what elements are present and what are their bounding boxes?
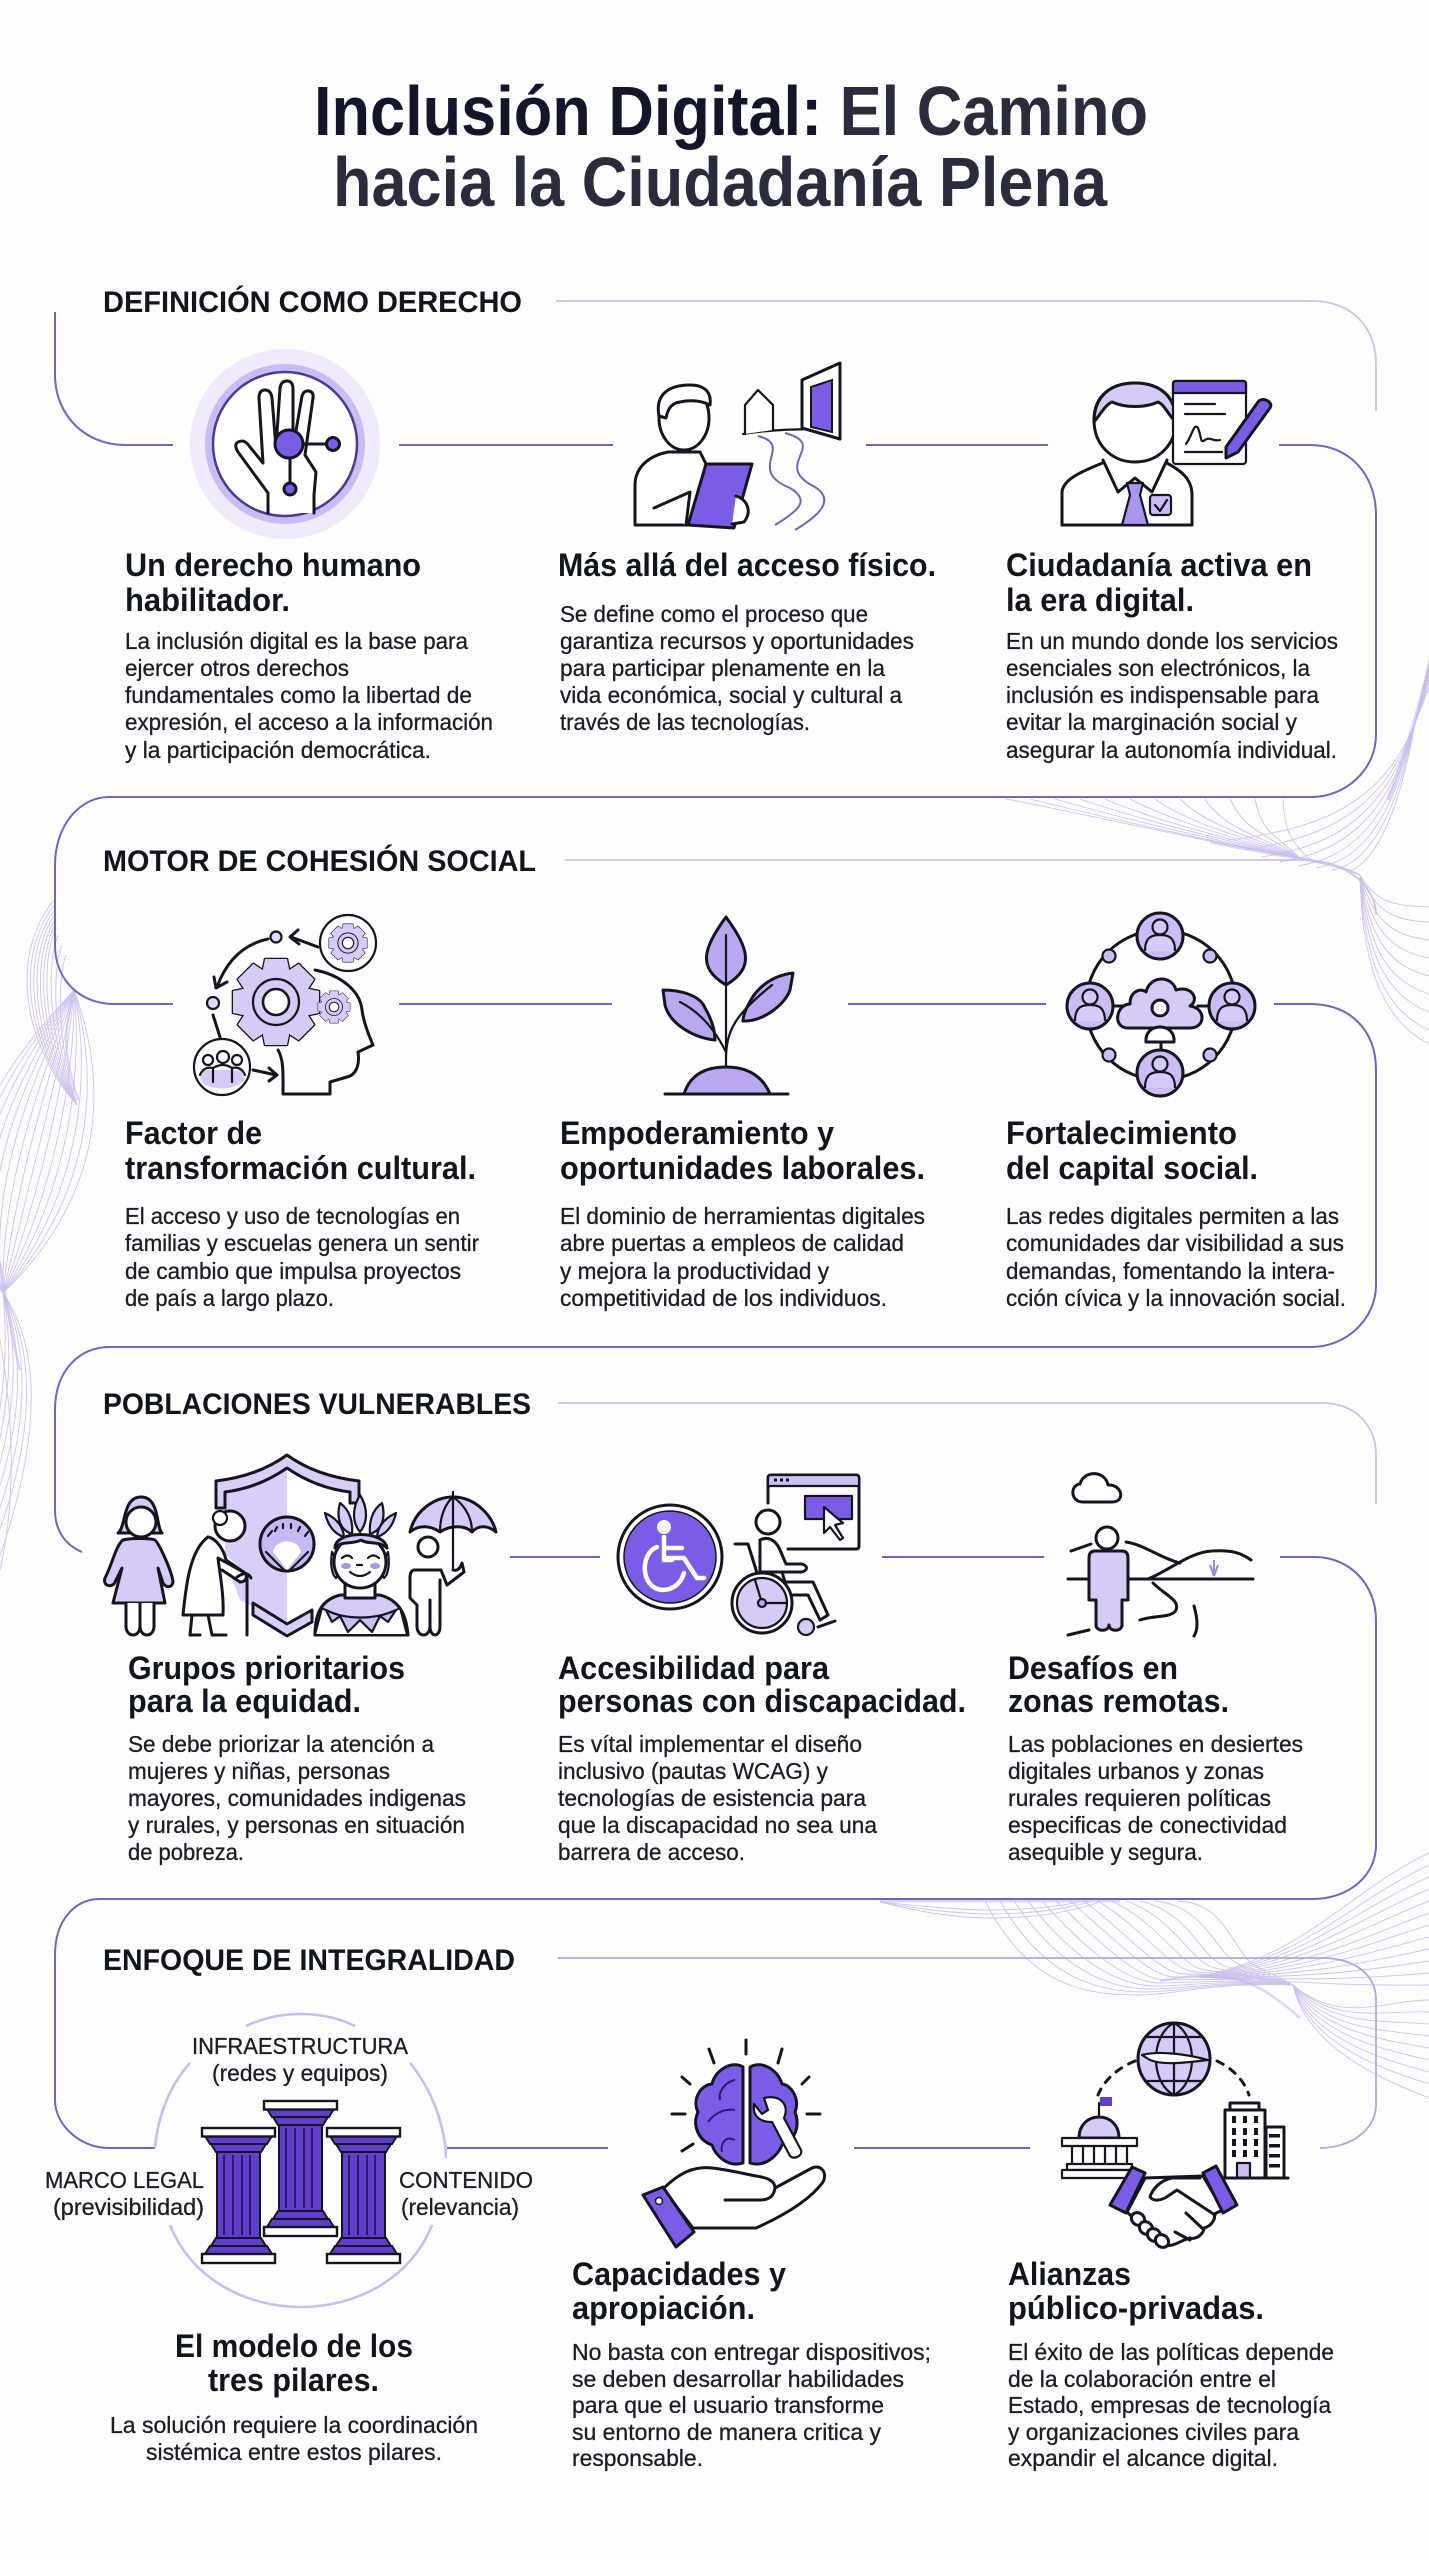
- icon: person with tablet and road: [635, 363, 840, 530]
- text: más allá del acceso físico: Más allá del acceso físico.: [558, 547, 936, 583]
- text: modelo de tres pilares: tres pilares.: [208, 2362, 379, 2398]
- text: factor de transformación: de país a largo plazo.: [125, 1285, 334, 1311]
- text: accesibilidad: [558, 1650, 966, 1865]
- text: capacidades: [572, 2256, 931, 2471]
- text: factor de transformación: transformación cultural.: [125, 1150, 476, 1186]
- label: infraestructura: [192, 2033, 409, 2086]
- label: marco legal: (previsibilidad): [53, 2194, 204, 2220]
- section heading: POBLACIONES VULNERABLES: [103, 1388, 531, 1421]
- section heading: MOTOR DE COHESIÓN SOCIAL: [103, 844, 536, 878]
- icon: brain in hand: [643, 2040, 825, 2247]
- text: un derecho humano: [125, 547, 493, 763]
- text: un derecho humano: La inclusión digital es la base para: [125, 628, 468, 654]
- text: ciudadanía activa: la era digital.: [1006, 582, 1194, 618]
- text: empoderamiento: [560, 1115, 925, 1311]
- text: ciudadanía activa: evitar la marginación social y: [1006, 709, 1297, 735]
- text: accesibilidad: Es vítal implementar el diseño: [558, 1731, 862, 1757]
- icon: remote zones: [1068, 1474, 1253, 1636]
- text: factor de transformación: [125, 1115, 479, 1311]
- text: empoderamiento: oportunidades laborales.: [560, 1150, 925, 1186]
- decorative wave lines: [0, 660, 1429, 2098]
- text: un derecho humano: fundamentales como la libertad de: [125, 682, 472, 708]
- text: modelo de tres pilares: sistémica entre estos pilares.: [146, 2439, 442, 2465]
- text: grupos prioritarios: [128, 1650, 466, 1865]
- icon: hand in circle: [190, 349, 380, 539]
- text: alianzas: de la colaboración entre el: [1008, 2366, 1276, 2392]
- text: empoderamiento: abre puertas a empleos de calidad: [560, 1230, 904, 1256]
- text: fortalecimiento: Las redes digitales permiten a las: [1006, 1203, 1339, 1229]
- text: accesibilidad: inclusivo (pautas WCAG) y: [558, 1758, 828, 1784]
- text: ciudadanía activa: asegurar la autonomía individual.: [1006, 737, 1337, 763]
- text: grupos prioritarios: y rurales, y personas en situación: [128, 1812, 465, 1838]
- text: más allá del acceso físico: Se define como el proceso que: [560, 601, 868, 627]
- text: fortalecimiento: comunidades dar visibilidad a sus: [1006, 1230, 1344, 1256]
- text: alianzas: expandir el alcance digital.: [1008, 2445, 1278, 2471]
- text: más allá del acceso físico: para participar plenamente en la: [560, 655, 885, 681]
- icon: head with gears: [194, 915, 376, 1095]
- panel: motor de cohesión social: [103, 844, 1346, 1311]
- title: Inclusión Digital: El Camino: [314, 72, 1148, 150]
- boy with umbrella: [410, 1492, 496, 1635]
- shield: [216, 1455, 359, 1636]
- text: capacidades: su entorno de manera critica y: [572, 2419, 881, 2445]
- section heading: ENFOQUE DE INTEGRALIDAD: [103, 1944, 515, 1977]
- label: marco legal: [45, 2167, 204, 2220]
- text: alianzas: El éxito de las políticas depende: [1008, 2339, 1334, 2365]
- text: factor de transformación: familias y escuelas genera un sentir: [125, 1230, 479, 1256]
- icon: public-private alliance: [1062, 2023, 1288, 2250]
- text: más allá del acceso físico: [558, 547, 936, 735]
- panel: enfoque de integralidad: [45, 1944, 1334, 2471]
- text: capacidades: No basta con entregar dispositivos;: [572, 2339, 931, 2365]
- text: más allá del acceso físico: través de las tecnologías.: [560, 709, 810, 735]
- text: empoderamiento: El dominio de herramientas digitales: [560, 1203, 925, 1229]
- text: capacidades: responsable.: [572, 2445, 703, 2471]
- text: alianzas: público-privadas.: [1008, 2290, 1264, 2326]
- text: alianzas: Estado, empresas de tecnología: [1008, 2392, 1331, 2418]
- text: desafíos: asequible y segura.: [1008, 1839, 1203, 1865]
- text: modelo de tres pilares: [110, 2328, 478, 2465]
- text: factor de transformación: de cambio que impulsa proyectos: [125, 1258, 461, 1284]
- label: infraestructura: (redes y equipos): [212, 2060, 388, 2086]
- decorative wave thick accents: [0, 670, 1429, 2018]
- text: desafíos: digitales urbanos y zonas: [1008, 1758, 1264, 1784]
- text: fortalecimiento: cción cívica y la innovación social.: [1006, 1285, 1346, 1311]
- text: alianzas: y organizaciones civiles para: [1008, 2419, 1299, 2445]
- text: modelo de tres pilares: La solución requiere la coordinación: [110, 2412, 478, 2438]
- icon: priority groups with shield: [105, 1455, 496, 1636]
- text: más allá del acceso físico: garantiza recursos y oportunidades: [560, 628, 914, 654]
- panel: poblaciones vulnerables: [103, 1388, 1303, 1865]
- label: marco legal: MARCO LEGAL: [45, 2167, 204, 2193]
- text: empoderamiento: y mejora la productividad y: [560, 1258, 829, 1284]
- text: factor de transformación: El acceso y uso de tecnologías en: [125, 1203, 460, 1229]
- icon: growing plant: [663, 917, 793, 1094]
- label: contenido: (relevancia): [401, 2194, 519, 2220]
- panel: definición como derecho: [103, 285, 1338, 763]
- title: hacia la Ciudadanía Plena: [333, 143, 1108, 221]
- text: más allá del acceso físico: vida económica, social y cultural a: [560, 682, 902, 708]
- text: desafíos: Las poblaciones en desiertes: [1008, 1731, 1303, 1757]
- text: grupos prioritarios: Grupos prioritarios: [128, 1650, 405, 1686]
- label: contenido: [399, 2167, 533, 2220]
- panel connectors: section outlines: [55, 301, 1376, 2148]
- text: accesibilidad: tecnologías de esistencia para: [558, 1785, 866, 1811]
- text: capacidades: se deben desarrollar habilidades: [572, 2366, 904, 2392]
- text: fortalecimiento: demandas, fomentando la intera-: [1006, 1258, 1335, 1284]
- text: grupos prioritarios: de pobreza.: [128, 1839, 244, 1865]
- text: ciudadanía activa: inclusión es indispensable para: [1006, 682, 1319, 708]
- indigenous figure: [315, 1495, 408, 1635]
- text: desafíos: zonas remotas.: [1008, 1683, 1229, 1719]
- text: modelo de tres pilares: El modelo de los: [175, 2328, 413, 2364]
- girl figure: [105, 1497, 173, 1635]
- icon: citizen with document: [1062, 381, 1271, 525]
- text: ciudadanía activa: Ciudadanía activa en: [1006, 547, 1312, 583]
- text: desafíos: Desafíos en: [1008, 1650, 1178, 1686]
- text: ciudadanía activa: [1006, 547, 1338, 763]
- text: capacidades: para que el usuario transforme: [572, 2392, 884, 2418]
- text: un derecho humano: Un derecho humano: [125, 547, 421, 583]
- text: capacidades: apropiación.: [572, 2290, 755, 2326]
- text: un derecho humano: ejercer otros derechos: [125, 655, 349, 681]
- text: empoderamiento: competitividad de los individuos.: [560, 1285, 887, 1311]
- text: grupos prioritarios: mujeres y niñas, personas: [128, 1758, 390, 1784]
- text: ciudadanía activa: En un mundo donde los servicios: [1006, 628, 1338, 654]
- text: fortalecimiento: Fortalecimiento: [1006, 1115, 1237, 1151]
- text: accesibilidad: personas con discapacidad.: [558, 1683, 966, 1719]
- text: un derecho humano: expresión, el acceso a la información: [125, 709, 493, 735]
- text: accesibilidad: que la discapacidad no sea una: [558, 1812, 877, 1838]
- text: fortalecimiento: [1006, 1115, 1346, 1311]
- text: grupos prioritarios: para la equidad.: [128, 1683, 361, 1719]
- text: desafíos: [1008, 1650, 1303, 1865]
- text: ciudadanía activa: esenciales son electrónicos, la: [1006, 655, 1310, 681]
- text: accesibilidad: Accesibilidad para: [558, 1650, 829, 1686]
- text: empoderamiento: Empoderamiento y: [560, 1115, 834, 1151]
- text: alianzas: Alianzas: [1008, 2256, 1131, 2292]
- diagram: three pillars: [45, 2014, 533, 2307]
- section heading: DEFINICIÓN COMO DERECHO: [103, 285, 522, 319]
- text: fortalecimiento: del capital social.: [1006, 1150, 1258, 1186]
- text: grupos prioritarios: Se debe priorizar la atención a: [128, 1731, 434, 1757]
- text: un derecho humano: y la participación democrática.: [125, 737, 431, 763]
- text: grupos prioritarios: mayores, comunidades indigenas: [128, 1785, 466, 1811]
- elder figure: [183, 1511, 251, 1635]
- text: desafíos: rurales requieren políticas: [1008, 1785, 1271, 1811]
- text: capacidades: Capacidades y: [572, 2256, 786, 2292]
- text: desafíos: especificas de conectividad: [1008, 1812, 1287, 1838]
- title: [314, 72, 1148, 221]
- icon: wheelchair accessibility: [618, 1475, 859, 1635]
- label: contenido: CONTENIDO: [399, 2167, 533, 2193]
- icon: network with cloud: [1067, 913, 1255, 1096]
- text: alianzas: [1008, 2256, 1334, 2471]
- label: infraestructura: INFRAESTRUCTURA: [192, 2033, 409, 2059]
- text: accesibilidad: barrera de acceso.: [558, 1839, 745, 1865]
- text: un derecho humano: habilitador.: [125, 582, 290, 618]
- text: factor de transformación: Factor de: [125, 1115, 262, 1151]
